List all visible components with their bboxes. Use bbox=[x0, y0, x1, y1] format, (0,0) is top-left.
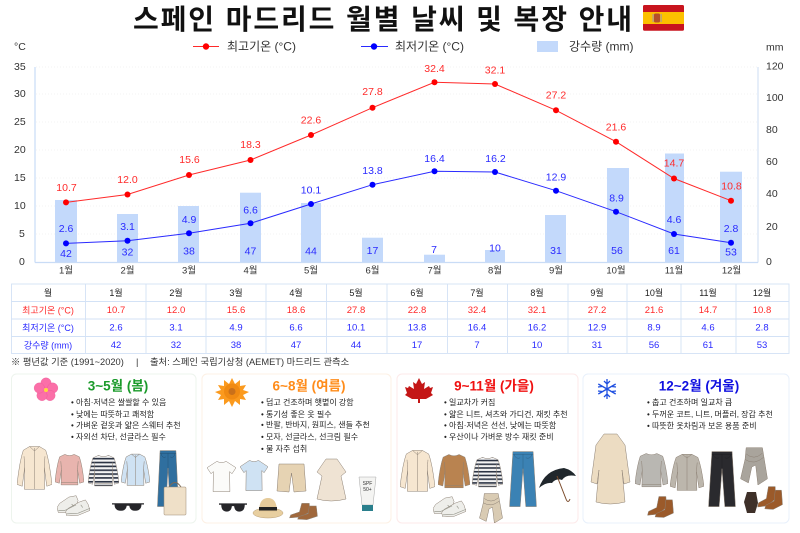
winter heading: 12~2월 (겨울) bbox=[659, 378, 739, 394]
clothing: cream shirt bbox=[17, 446, 52, 489]
month labels bbox=[59, 264, 741, 276]
table header row: 10월 bbox=[645, 287, 663, 298]
clothing: brown boots bbox=[648, 497, 673, 517]
left axis ticks: 5 bbox=[19, 228, 25, 240]
low temperature line: 2.6 bbox=[59, 223, 73, 235]
precipitation labels: 7 bbox=[431, 244, 437, 256]
right axis ticks: 60 bbox=[766, 156, 778, 168]
autumn tips: • 일교차가 커짐 bbox=[444, 397, 495, 407]
clothing: white tee bbox=[207, 461, 236, 492]
high temperature line: 22.6 bbox=[301, 114, 321, 126]
table row: low temperature: 3.1 bbox=[169, 322, 183, 334]
autumn heading: 9~11월 (가을) bbox=[454, 378, 534, 394]
low temperature line: 12.9 bbox=[546, 172, 566, 184]
low temperature line: 2.8 bbox=[724, 223, 738, 235]
winter tips: • 두꺼운 코트, 니트, 머플러, 장갑 추천 bbox=[647, 409, 773, 419]
high temperature line: 27.8 bbox=[362, 86, 383, 98]
left axis unit: °C bbox=[14, 41, 26, 53]
icon: cherry blossom bbox=[34, 378, 58, 401]
summer tips: • 모자, 선글라스, 선크림 필수 bbox=[261, 432, 358, 442]
table row: precipitation: 31 bbox=[592, 340, 602, 351]
clothing: sunglasses bbox=[112, 503, 144, 511]
month labels: 5월 bbox=[304, 264, 318, 276]
left axis ticks: 30 bbox=[14, 88, 26, 100]
summer tips: • 반팔, 반바지, 원피스, 샌들 추천 bbox=[261, 420, 370, 430]
precipitation labels: 42 bbox=[60, 248, 72, 260]
table row: low temperature: 2.6 bbox=[109, 322, 123, 334]
legend bbox=[193, 40, 633, 54]
table row: high temperature: 10.8 bbox=[753, 305, 771, 316]
clothing: striped top bbox=[472, 457, 503, 487]
autumn tips bbox=[444, 397, 568, 442]
clothing: blue short shirt bbox=[240, 460, 268, 491]
summer tips: • 물 자주 섭취 bbox=[261, 444, 307, 454]
clothing: gray sweater bbox=[635, 454, 668, 487]
table row: low temperature: 16.4 bbox=[468, 322, 486, 334]
precipitation labels bbox=[60, 243, 737, 260]
table header row: 7월 bbox=[470, 287, 484, 298]
autumn tips: • 우산이나 가벼운 방수 재킷 준비 bbox=[444, 432, 554, 442]
clothing: gray scarf bbox=[741, 448, 767, 485]
clothing: beige coat bbox=[591, 434, 630, 504]
clothing: sunscreen bbox=[359, 477, 376, 511]
month labels: 12월 bbox=[722, 264, 741, 276]
high temperature line bbox=[56, 63, 742, 205]
table row: low temperature: 2.8 bbox=[755, 322, 769, 334]
table header row: 1월 bbox=[109, 287, 123, 298]
icon: snowflake bbox=[598, 379, 616, 399]
clothing: scarf bbox=[479, 494, 503, 523]
low temperature line: 6.6 bbox=[243, 204, 258, 216]
icon: maple leaf bbox=[405, 378, 433, 403]
table header row: 11월 bbox=[699, 287, 717, 298]
winter tips: • 춥고 건조하며 일교차 큼 bbox=[647, 397, 732, 407]
left axis ticks: 15 bbox=[14, 172, 26, 184]
precipitation labels: 31 bbox=[550, 245, 562, 257]
left axis ticks: 0 bbox=[19, 256, 25, 268]
table row: precipitation bbox=[24, 340, 767, 351]
high temperature line: 27.2 bbox=[546, 90, 566, 102]
precipitation labels: 10 bbox=[489, 243, 501, 255]
clothing: sunglasses bbox=[219, 503, 247, 512]
chart: monthly temperature and precipitation bbox=[14, 60, 784, 276]
right axis ticks bbox=[766, 60, 784, 268]
clothing: sneakers bbox=[57, 496, 90, 516]
month labels: 9월 bbox=[549, 264, 563, 276]
footnote: 출처: 스페인 국립기상청 (AEMET) 마드리드 관측소 bbox=[150, 356, 350, 367]
low temperature line bbox=[59, 153, 738, 246]
winter tips: • 따뜻한 옷차림과 보온 용품 준비 bbox=[647, 420, 757, 430]
clothing: sneakers bbox=[433, 497, 466, 517]
table header row: 9월 bbox=[590, 287, 604, 298]
table row: low temperature: 10.1 bbox=[347, 322, 365, 334]
spring tips: • 낮에는 따뜻하고 쾌적함 bbox=[71, 409, 155, 419]
low temperature line: 16.2 bbox=[485, 153, 506, 165]
table row: low temperature bbox=[22, 322, 769, 334]
precipitation labels: 17 bbox=[367, 245, 378, 257]
table row: precipitation: 17 bbox=[412, 340, 422, 351]
table header row bbox=[44, 287, 771, 298]
footnote bbox=[11, 356, 350, 367]
legend: 최저기온 (°C) bbox=[395, 40, 464, 54]
month labels: 8월 bbox=[488, 264, 502, 276]
table row: high temperature: 22.8 bbox=[408, 305, 426, 316]
table header row: 5월 bbox=[349, 287, 363, 298]
table header row: 월 bbox=[44, 287, 52, 298]
clothing: blue shirt bbox=[121, 454, 150, 485]
panel: spring bbox=[12, 374, 196, 523]
spring heading: 3~5월 (봄) bbox=[88, 378, 148, 394]
precipitation labels: 56 bbox=[611, 245, 623, 257]
clothing: umbrella bbox=[539, 468, 576, 502]
table row: high temperature: 10.7 bbox=[107, 305, 125, 316]
month labels: 2월 bbox=[120, 264, 135, 276]
table row: precipitation: 10 bbox=[532, 340, 542, 351]
right axis unit: mm bbox=[766, 42, 784, 54]
footnote: | bbox=[136, 357, 138, 367]
table row: precipitation: 38 bbox=[231, 340, 241, 351]
table row: high temperature: 32.1 bbox=[528, 305, 546, 316]
icon: Spanish flag bbox=[643, 5, 684, 31]
clothing: tote bag bbox=[164, 482, 186, 515]
clothing: straw hat bbox=[253, 498, 283, 518]
clothing: sunscreen: SPF bbox=[363, 481, 372, 487]
panel: winter bbox=[583, 374, 789, 523]
autumn tips: • 아침·저녁은 선선, 낮에는 따뜻함 bbox=[444, 420, 557, 430]
left axis ticks: 10 bbox=[14, 200, 26, 212]
spring tips: • 자외선 차단, 선글라스 필수 bbox=[71, 432, 166, 442]
winter tips bbox=[647, 397, 773, 430]
spring tips: • 아침·저녁은 쌀쌀할 수 있음 bbox=[71, 397, 166, 407]
right axis ticks: 0 bbox=[766, 256, 772, 268]
table row: precipitation: 56 bbox=[649, 340, 659, 351]
precipitation labels: 32 bbox=[122, 247, 133, 259]
clothing: gloves bbox=[744, 492, 758, 513]
autumn tips: • 얇은 니트, 셔츠와 가디건, 재킷 추천 bbox=[444, 409, 568, 419]
clothing: brown boots pair bbox=[758, 487, 782, 509]
table row: precipitation: 32 bbox=[171, 340, 181, 351]
table row: high temperature: 12.0 bbox=[167, 305, 185, 316]
summer tips: • 통기성 좋은 옷 필수 bbox=[261, 409, 332, 419]
table header row: 4월 bbox=[289, 287, 303, 298]
table row: high temperature: 최고기온 (°C) bbox=[22, 306, 74, 316]
icon: sun bbox=[215, 378, 249, 407]
footnote: ※ 평년값 기준 (1991~2020) bbox=[11, 356, 124, 367]
clothing: dress bbox=[317, 459, 346, 501]
legend: 최고기온 (°C) bbox=[227, 40, 296, 54]
low temperature line: 10.1 bbox=[301, 184, 321, 196]
table row: low temperature: 최저기온 (°C) bbox=[22, 323, 74, 333]
month labels: 6월 bbox=[365, 264, 380, 276]
precipitation labels: 47 bbox=[245, 246, 256, 258]
low temperature line: 3.1 bbox=[120, 221, 135, 233]
right axis ticks: 100 bbox=[766, 92, 784, 104]
table row: low temperature: 12.9 bbox=[588, 322, 606, 334]
clothing: jeans bbox=[510, 452, 536, 507]
table row: precipitation: 44 bbox=[351, 340, 361, 351]
low temperature line: 4.9 bbox=[182, 214, 196, 226]
precipitation labels: 53 bbox=[725, 247, 737, 259]
clothing: gray cardigan bbox=[670, 454, 704, 490]
table row: high temperature: 15.6 bbox=[227, 305, 245, 316]
precipitation bars bbox=[55, 154, 742, 262]
high temperature line: 10.7 bbox=[56, 182, 77, 194]
month labels: 7월 bbox=[427, 264, 442, 276]
table row: precipitation: 47 bbox=[291, 340, 301, 351]
table row: low temperature: 6.6 bbox=[289, 322, 303, 334]
low temperature line: 8.9 bbox=[609, 192, 624, 204]
left axis ticks: 20 bbox=[14, 144, 26, 156]
high temperature line: 12.0 bbox=[117, 174, 138, 186]
table row: low temperature: 4.9 bbox=[229, 322, 243, 334]
table row: low temperature: 13.8 bbox=[408, 322, 426, 334]
clothing: striped top bbox=[88, 455, 119, 486]
table row: low temperature: 4.6 bbox=[701, 322, 715, 334]
high temperature line: 15.6 bbox=[179, 154, 200, 166]
table header row: 8월 bbox=[530, 287, 544, 298]
right axis ticks: 80 bbox=[766, 124, 778, 136]
low temperature line: 16.4 bbox=[424, 153, 445, 165]
summer tips: • 덥고 건조하며 햇볕이 강함 bbox=[261, 397, 354, 407]
legend: 강수량 (mm) bbox=[569, 40, 633, 54]
high temperature line: 32.1 bbox=[485, 64, 505, 76]
month labels: 4월 bbox=[243, 264, 258, 276]
table row: high temperature bbox=[22, 305, 771, 316]
spring tips bbox=[71, 397, 181, 442]
clothing: sunscreen: 50+ bbox=[363, 487, 372, 493]
clothing: sandals bbox=[290, 503, 317, 520]
clothing: pink sweater bbox=[55, 454, 84, 485]
high temperature line: 18.3 bbox=[240, 139, 261, 151]
month labels: 3월 bbox=[182, 264, 196, 276]
table header row: 6월 bbox=[410, 287, 424, 298]
table row: precipitation: 강수량 (mm) bbox=[24, 340, 72, 350]
month labels: 1월 bbox=[59, 264, 73, 276]
right axis ticks: 40 bbox=[766, 188, 778, 200]
month labels: 10월 bbox=[606, 264, 626, 276]
low temperature line: 13.8 bbox=[362, 165, 383, 177]
table row: low temperature: 8.9 bbox=[647, 322, 661, 334]
table row: high temperature: 14.7 bbox=[699, 305, 717, 316]
table row: high temperature: 18.6 bbox=[287, 305, 305, 316]
table header row: 3월 bbox=[229, 287, 243, 298]
panel: summer bbox=[202, 374, 391, 523]
clothing: cream jacket bbox=[400, 450, 435, 491]
right axis ticks: 20 bbox=[766, 221, 778, 233]
clothing: brown sweater bbox=[438, 454, 470, 488]
high temperature line: 14.7 bbox=[664, 158, 684, 170]
precipitation labels: 38 bbox=[183, 246, 195, 258]
spring tips: • 가벼운 겉옷과 얇은 스웨터 추천 bbox=[71, 420, 181, 430]
clothing: jeans bbox=[157, 451, 179, 507]
high temperature line: 21.6 bbox=[606, 122, 626, 134]
clothing: shorts bbox=[277, 464, 306, 492]
table row: high temperature: 32.4 bbox=[468, 305, 486, 316]
table header row: 12월 bbox=[753, 287, 771, 298]
table row: precipitation: 42 bbox=[111, 340, 121, 351]
high temperature line: 32.4 bbox=[424, 63, 445, 75]
table row: precipitation: 61 bbox=[703, 340, 713, 351]
high temperature line: 10.8 bbox=[721, 180, 742, 192]
table row: low temperature: 16.2 bbox=[528, 322, 546, 334]
table row: high temperature: 27.8 bbox=[347, 305, 365, 316]
left axis ticks: 35 bbox=[14, 61, 26, 73]
left axis ticks bbox=[14, 61, 26, 268]
precipitation labels: 61 bbox=[668, 245, 680, 257]
table row: precipitation: 53 bbox=[757, 340, 767, 351]
table row: high temperature: 27.2 bbox=[588, 305, 606, 316]
clothing: black jeans bbox=[709, 452, 735, 507]
data table bbox=[11, 284, 789, 354]
precipitation labels: 44 bbox=[305, 246, 317, 258]
table row: precipitation: 7 bbox=[474, 340, 480, 351]
month labels: 11월 bbox=[665, 264, 683, 276]
left axis ticks: 25 bbox=[14, 116, 26, 128]
low temperature line: 4.6 bbox=[667, 214, 681, 226]
summer heading: 6~8월 (여름) bbox=[273, 378, 345, 394]
table row: high temperature: 21.6 bbox=[645, 305, 663, 316]
right axis ticks: 120 bbox=[766, 60, 784, 72]
panel: autumn bbox=[397, 374, 578, 523]
table header row: 2월 bbox=[169, 287, 183, 298]
summer tips bbox=[261, 397, 370, 454]
